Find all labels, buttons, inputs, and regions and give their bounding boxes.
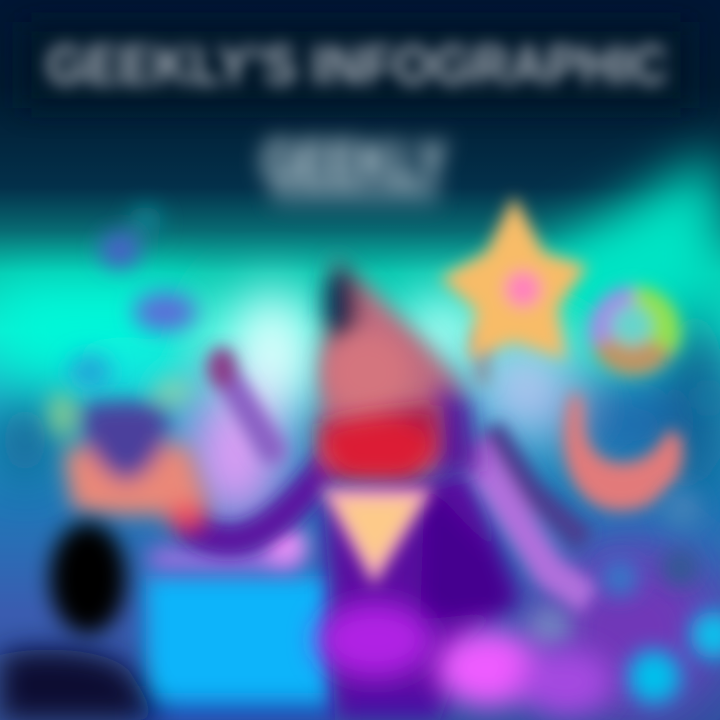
wizard face	[326, 332, 410, 412]
crescent icon	[564, 392, 683, 511]
wizard arm holding the shield	[195, 462, 330, 540]
star stick	[474, 330, 492, 385]
blue laptop screen	[125, 576, 340, 720]
viewer head	[50, 522, 126, 634]
wizard robe	[322, 470, 520, 720]
star icon	[440, 196, 588, 360]
floating shapes	[68, 206, 197, 390]
title text: GEEKLY'S INFOGRAPHIC	[46, 33, 668, 96]
title	[22, 22, 690, 108]
red scarf	[316, 404, 440, 480]
lilac haze above the screen	[150, 548, 300, 570]
viewer silhouette	[0, 522, 160, 720]
circle accents	[528, 386, 720, 704]
pink patch beneath the arm	[263, 527, 307, 563]
wizard body and hat	[320, 258, 480, 480]
cape stripes	[470, 428, 590, 600]
shield icon	[48, 380, 208, 532]
yellow emblem	[320, 488, 434, 586]
magenta lower robe	[317, 602, 433, 678]
pie chart icon	[588, 286, 681, 376]
title backing band	[22, 22, 690, 108]
magenta glow lower right	[436, 630, 613, 716]
wizard figure	[150, 258, 590, 720]
subtitle	[262, 128, 447, 204]
subtitle: GEEKLY	[262, 128, 447, 195]
aurora glow	[0, 150, 720, 715]
wand arm	[207, 347, 272, 450]
viewer body	[0, 650, 160, 720]
